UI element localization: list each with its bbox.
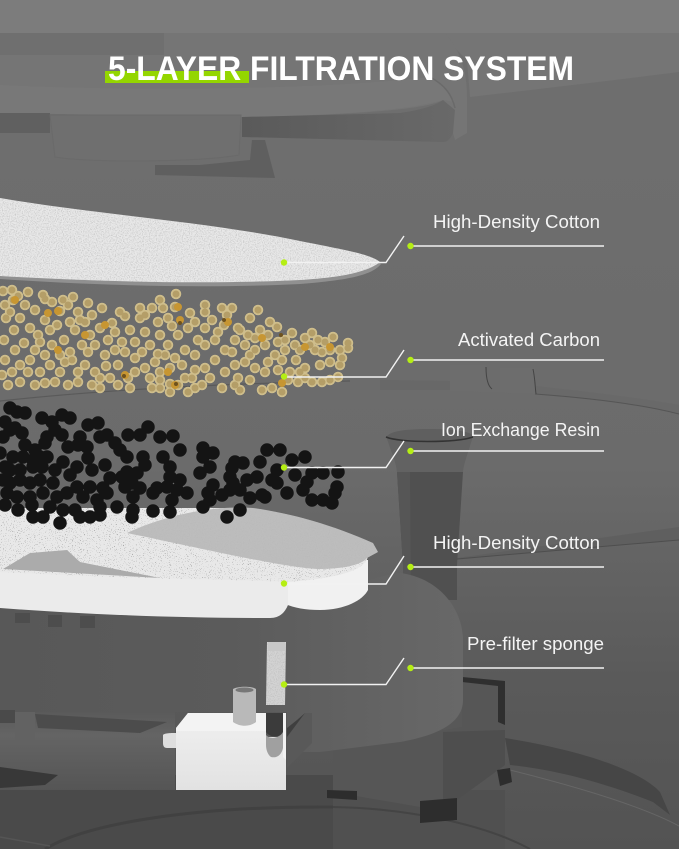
cotton inner grey triangle (3, 550, 160, 578)
lid dark underside (242, 100, 455, 142)
top band (0, 0, 679, 33)
callout: activated carbon (281, 329, 604, 380)
water pump channel (287, 713, 312, 768)
central tube (386, 429, 473, 600)
callout: high-density cotton (top): High-Density Cotton (433, 211, 600, 232)
cotton front lobe (0, 566, 288, 618)
reservoir body (0, 573, 463, 752)
fountain clip tabs (450, 365, 536, 394)
callout: ion exchange resin (281, 419, 604, 471)
lid (0, 33, 679, 178)
cap bracket (155, 140, 275, 178)
title (105, 50, 574, 88)
cotton grey top surface (127, 507, 378, 569)
callout: high-density cotton (lower) (281, 532, 604, 587)
reservoir lower box (327, 677, 512, 823)
layer 2: activated carbon granules (2, 290, 348, 392)
callout: activated carbon: Activated Carbon (458, 329, 600, 350)
title highlight (105, 71, 249, 83)
pump body (176, 713, 286, 790)
box feet (327, 768, 512, 823)
pump nozzle (163, 733, 176, 748)
lower right wedge (457, 527, 679, 559)
pump intake slot (266, 713, 283, 736)
layer 4: high-density cotton (lower) (0, 507, 378, 628)
title text: 5-LAYER FILTRATION SYSTEM (108, 50, 574, 88)
floor and base (0, 738, 679, 849)
pump outlet tube (233, 687, 256, 726)
cotton speckled mid band (0, 508, 368, 582)
callout: pre-filter sponge (281, 633, 604, 688)
water pump (163, 687, 286, 790)
cotton right lobe (280, 560, 368, 610)
left shelf (0, 710, 175, 790)
callout: ion exchange resin: Ion Exchange Resin (441, 419, 600, 440)
callout: pre-filter sponge: Pre-filter sponge (467, 633, 604, 654)
layer 1: high-density cotton (0, 198, 381, 286)
reservoir rim lines (0, 380, 679, 559)
lid upper shell (0, 33, 679, 97)
layer 3: ion exchange resin (0, 408, 338, 523)
support feet (15, 613, 95, 628)
callout: high-density cotton (lower): High-Density Cotton (433, 532, 600, 553)
pre-filter sponge (266, 642, 286, 705)
callout: high-density cotton (top) (281, 211, 604, 266)
ribbed cap (50, 115, 241, 161)
